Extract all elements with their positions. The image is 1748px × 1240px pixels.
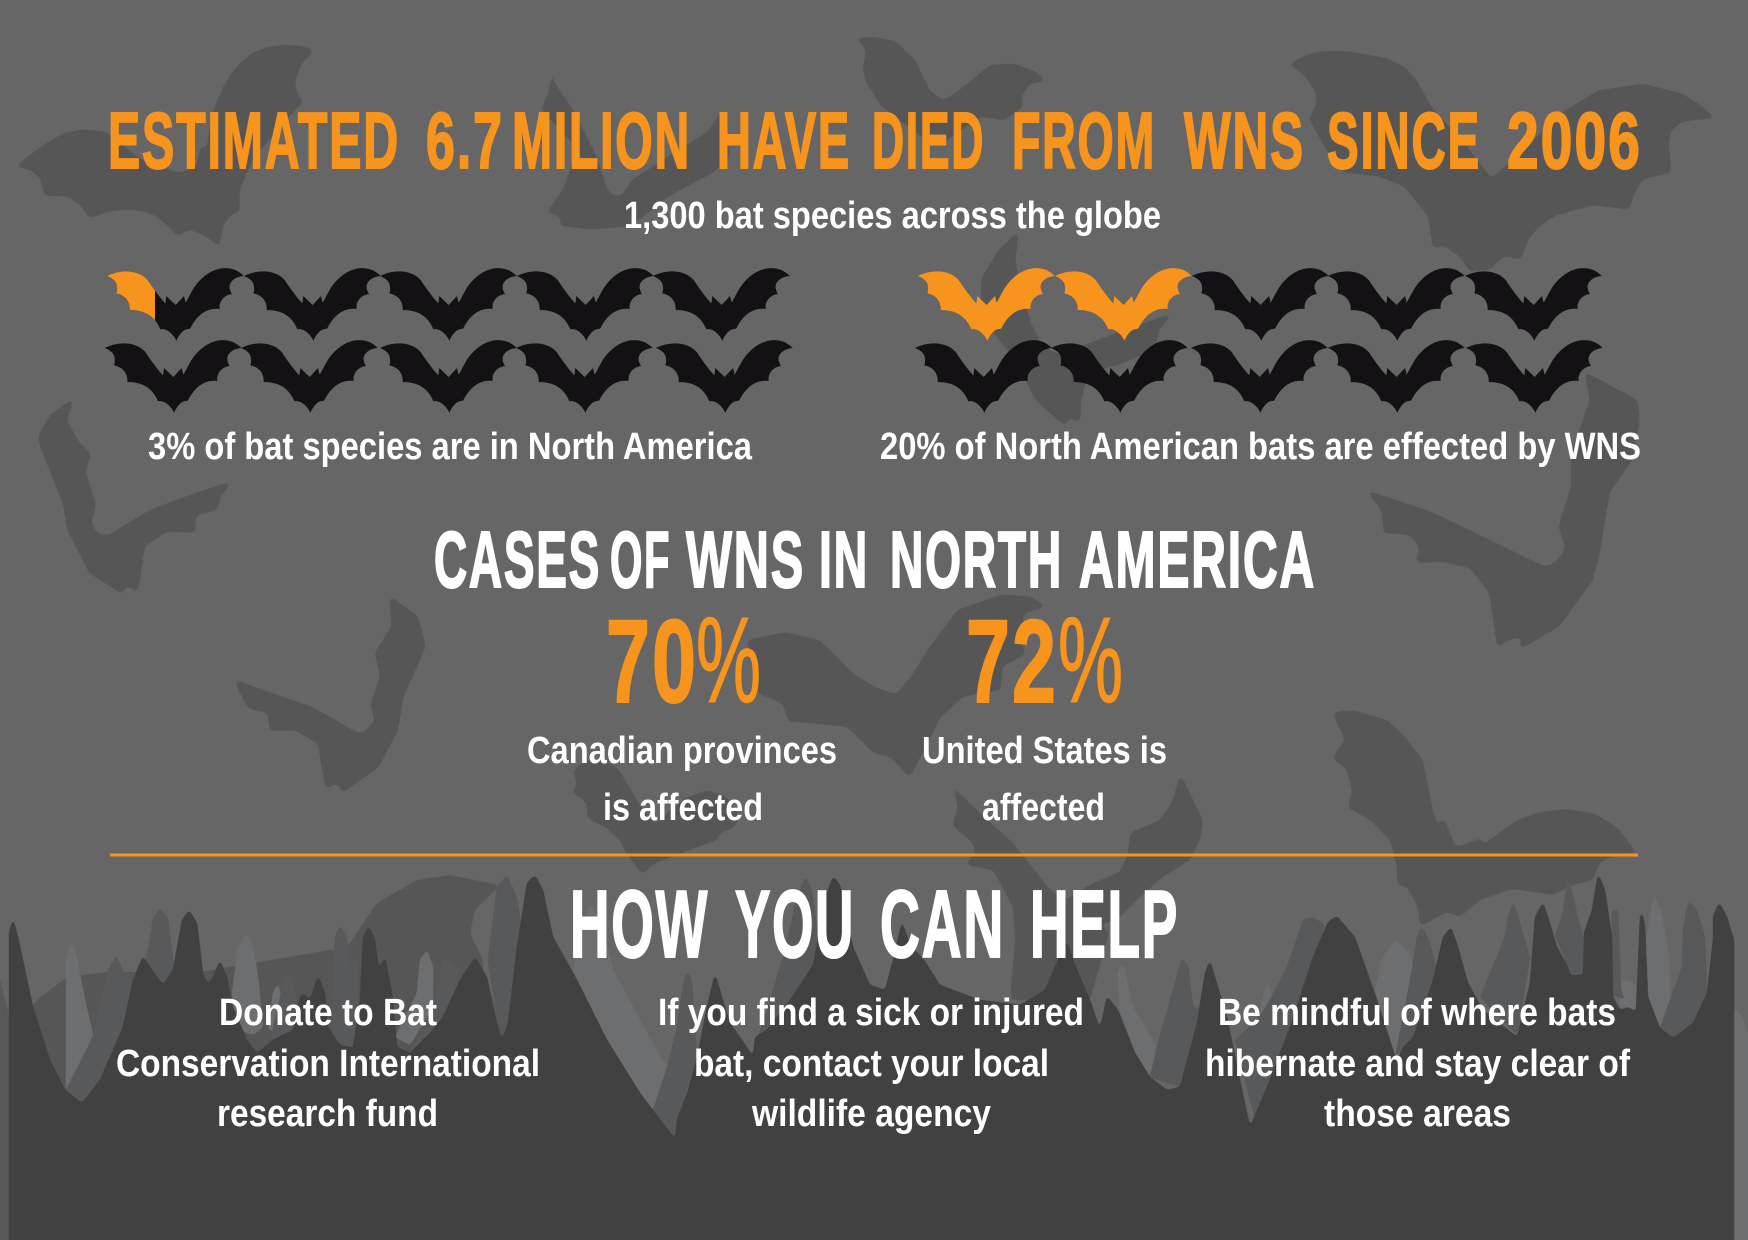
cave ground: dark layer [9, 873, 1734, 1240]
heading: how you can help [570, 871, 1179, 978]
cave stalagmites: light layer [66, 893, 1748, 1240]
tip: donate: Donate to Bat [219, 992, 437, 1034]
stat: 72% United States: % [1058, 592, 1123, 728]
stat: 70% Canadian provinces [527, 592, 837, 829]
title: SINCE [1327, 96, 1481, 185]
pictogram: 3% of bat species [105, 268, 793, 413]
title: ESTIMATED [108, 96, 400, 185]
stat: 72% United States: United States is [922, 730, 1167, 772]
tip: contact wildlife agency: wildlife agency [751, 1093, 991, 1135]
tip: donate: research fund [217, 1093, 438, 1135]
divider line [110, 854, 1638, 856]
pictogram: 20% of North American bats [915, 268, 1603, 413]
heading: how you can help: HOW [570, 871, 709, 978]
tip: donate [116, 992, 540, 1135]
cave stalagmites: mid layer [0, 873, 1707, 1240]
tip: contact wildlife agency: bat, contact your local [694, 1043, 1049, 1085]
tip: hibernation: those areas [1324, 1093, 1511, 1135]
title: DIED [872, 96, 985, 185]
heading: cases of WNS: OF [610, 515, 671, 604]
tip: donate: Conservation International [116, 1043, 540, 1085]
heading: cases of WNS: CASES [434, 515, 601, 604]
title: HAVE [717, 96, 851, 185]
stat: 70% Canadian provinces: Canadian provinces [527, 730, 837, 772]
heading: cases of WNS: IN [819, 515, 869, 604]
caption: 20%: 20% of North American bats are effected by WNS [880, 426, 1641, 468]
title: MILION [512, 96, 691, 185]
tip: contact wildlife agency: If you find a sick or injured [658, 992, 1084, 1034]
tip: hibernation: hibernate and stay clear of [1205, 1043, 1630, 1085]
heading: cases of WNS: WNS [686, 515, 805, 604]
title: FROM [1012, 96, 1156, 185]
heading: how you can help: YOU [735, 871, 855, 978]
title [108, 96, 1642, 185]
title: 2006 [1507, 96, 1642, 185]
stat: 70% Canadian provinces: 70 [606, 596, 698, 728]
stat: 70% Canadian provinces: % [696, 592, 761, 728]
stat: 72% United States: affected [982, 787, 1105, 829]
stat: 70% Canadian provinces: is affected [603, 787, 763, 829]
heading: how you can help: HELP [1030, 871, 1179, 978]
caption: 3%: 3% of bat species are in North America [148, 426, 753, 468]
stat: 72% United States [922, 592, 1167, 829]
tip: hibernation [1205, 992, 1630, 1135]
subtitle: 1,300 bat species across the globe [624, 195, 1161, 237]
heading: cases of WNS: AMERICA [1079, 515, 1316, 604]
heading: cases of WNS: NORTH [890, 515, 1063, 604]
tip: hibernation: Be mindful of where bats [1218, 992, 1616, 1034]
heading: cases of WNS [434, 515, 1316, 604]
tip: contact wildlife agency [658, 992, 1084, 1135]
stat: 72% United States: 72 [966, 596, 1058, 728]
title: 6.7 [426, 96, 504, 185]
heading: how you can help: CAN [880, 871, 1005, 978]
title: WNS [1184, 96, 1305, 185]
